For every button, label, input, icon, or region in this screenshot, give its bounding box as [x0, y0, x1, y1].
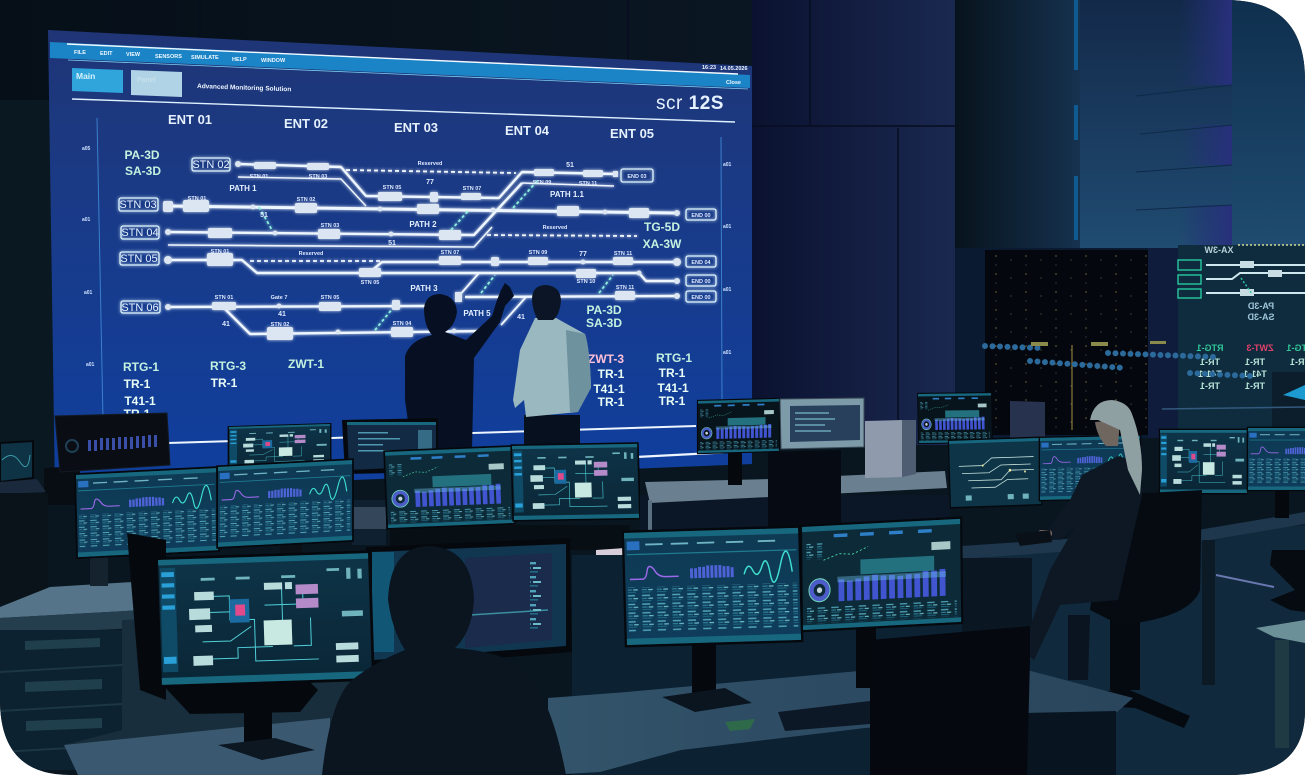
upper right wall panels	[955, 0, 1305, 250]
tab: secondary	[131, 70, 182, 97]
entrance headings: ENT 01	[168, 112, 212, 127]
small right desk	[1256, 620, 1305, 748]
entrance headings: ENT 02	[284, 116, 328, 131]
axis labels: a01	[84, 290, 93, 296]
status lists: TR-1	[124, 407, 151, 421]
foreground person	[322, 546, 566, 775]
entrance headings: ENT 03	[394, 120, 438, 135]
person: woman pointing at display	[405, 283, 514, 450]
main wall display: END 03	[627, 174, 647, 180]
small track labels: PATH 2	[409, 220, 437, 229]
axis labels: a01	[82, 217, 91, 223]
axis labels: a05	[82, 146, 91, 152]
route codes: SA-3D	[586, 316, 622, 330]
status lists: TR-1	[598, 367, 625, 381]
status lists: T41-1	[657, 381, 689, 395]
track diagram	[163, 161, 681, 340]
axis labels: a01	[723, 162, 732, 168]
menu bar: 14.05.2026	[720, 66, 748, 72]
front right desk	[548, 670, 1133, 775]
route codes: PA-3D	[124, 148, 160, 162]
chair at right back desk	[768, 450, 841, 528]
route codes: XA-3W	[643, 237, 682, 251]
menu bar: EDIT	[100, 51, 113, 57]
main wall display: END 00	[691, 213, 711, 219]
main wall display: STN 02	[192, 159, 230, 171]
tab: Main	[72, 68, 123, 93]
small track labels: STN 02	[271, 322, 289, 328]
status lists: RTG-1	[123, 360, 159, 374]
menu bar	[50, 42, 750, 89]
back row: log monitor	[342, 418, 438, 474]
desk drawers	[0, 630, 122, 770]
menu bar: WINDOW	[261, 58, 286, 64]
status lists: ZWT-1	[288, 357, 324, 371]
small track labels: Reserved	[418, 161, 442, 167]
menu bar: VIEW	[126, 52, 141, 58]
small track labels: STN 05	[321, 295, 339, 301]
small track labels: PATH 3	[410, 284, 438, 293]
route codes: TG-5D	[644, 220, 680, 234]
front right monitors	[622, 517, 963, 712]
small track labels: Reserved	[543, 225, 567, 231]
small track labels: STN 01	[211, 249, 229, 255]
small track labels: 51	[566, 162, 574, 169]
small track labels: STN 04	[393, 321, 412, 327]
small track labels: STN 07	[441, 250, 459, 256]
small track labels: STN 03	[309, 174, 327, 180]
screen number: scr 12S	[656, 93, 724, 114]
small track labels: 77	[579, 251, 587, 258]
glass wall with server racks and mirrored display: TR-1	[1200, 357, 1220, 367]
small track labels: 51	[260, 212, 268, 219]
small track labels: STN 07	[463, 186, 481, 192]
small track labels: STN 11	[579, 181, 597, 187]
small track labels: 51	[388, 240, 396, 247]
glass wall with server racks and mirrored display: TR-1	[1245, 357, 1265, 367]
menu bar: FILE	[74, 50, 86, 56]
glass wall with server racks and mirrored display	[955, 245, 1305, 438]
axis labels: a01	[723, 350, 732, 356]
small track labels: STN 11	[616, 285, 634, 291]
small track labels: 41	[278, 311, 286, 318]
small track labels: STN 09	[533, 180, 551, 186]
small track labels: STN 10	[577, 279, 595, 285]
floor right	[960, 525, 1305, 775]
screen subtitle: Advanced Monitoring Solution	[197, 83, 291, 93]
small track labels: STN 01	[215, 295, 233, 301]
small track labels: STN 01	[250, 174, 268, 180]
status lists: ZWT-3	[588, 352, 624, 366]
right back monitors	[697, 392, 1045, 485]
route codes: SA-3D	[125, 164, 161, 178]
status lists: T41-1	[593, 382, 625, 396]
menu bar: 16:23	[702, 65, 716, 71]
main wall display: END 00	[691, 295, 711, 301]
small track labels: STN 05	[361, 280, 379, 286]
small white screen	[596, 548, 622, 555]
status lists: TR-1	[211, 376, 238, 390]
small track labels: PATH 5	[463, 309, 491, 318]
axis labels: a01	[723, 287, 732, 293]
glass wall with server racks and mirrored display: T41-1	[1198, 369, 1222, 379]
dark equipment below display at left	[44, 466, 80, 505]
left equipment tower	[0, 493, 44, 500]
status lists	[124, 354, 692, 414]
chair behind front monitor	[127, 533, 318, 714]
small track labels: STN 05	[383, 185, 401, 191]
small track labels: Gate 7	[271, 295, 287, 301]
small track labels: 41	[222, 321, 230, 328]
small track labels: STN 11	[614, 251, 632, 257]
small track labels: PATH 1.1	[550, 190, 585, 199]
axis labels: a01	[86, 362, 95, 368]
glass wall with server racks and mirrored display: TR-1	[1200, 381, 1220, 391]
small track labels: 41	[517, 314, 525, 321]
menu bar: SENSORS	[155, 54, 182, 60]
back wall	[200, 0, 955, 445]
route codes	[124, 148, 682, 330]
person: man in white shirt	[513, 285, 591, 448]
middle floor	[68, 620, 350, 744]
back monitors: centre pair	[383, 442, 641, 550]
tab: secondary: Panel	[137, 77, 156, 84]
entrance headings: ENT 05	[610, 126, 654, 141]
small track labels: PATH 1	[229, 184, 257, 193]
status lists: TR-1	[598, 395, 625, 409]
route codes: PA-3D	[586, 303, 622, 317]
glass wall with server racks and mirrored display: PA-3D	[1247, 301, 1274, 311]
glass wall with server racks and mirrored display: T41-1	[1243, 369, 1267, 379]
white cabinet	[865, 420, 916, 478]
small track labels: STN 01	[188, 196, 206, 202]
glass wall with server racks and mirrored display: ZWT-3	[1246, 343, 1274, 353]
main wall display: END 04	[691, 260, 712, 266]
main wall display: END 00	[691, 279, 711, 285]
glass wall with server racks and mirrored display: TR-1	[1245, 381, 1265, 391]
back monitors: left pair	[74, 458, 386, 586]
station and end labels	[119, 158, 716, 313]
tab: Main: Main	[76, 71, 95, 81]
menu bar: SIMULATE	[191, 55, 219, 61]
front monitor: second screen	[366, 538, 572, 668]
small track labels: STN 09	[529, 250, 547, 256]
seated woman	[1015, 400, 1202, 728]
back row: dark laptop	[55, 413, 170, 472]
glass wall with server racks and mirrored display: SA-3D	[1247, 312, 1275, 322]
main wall display	[48, 30, 752, 492]
menu bar: Close	[726, 80, 741, 86]
status lists: RTG-1	[656, 351, 692, 365]
status lists: RTG-3	[210, 359, 246, 373]
left back desk	[0, 582, 134, 630]
back row: process monitor	[228, 423, 332, 465]
entrance headings	[168, 115, 654, 138]
right middle desk	[962, 512, 1305, 685]
small track labels: STN 03	[321, 223, 339, 229]
entrance headings: ENT 04	[505, 123, 550, 138]
floor centre	[572, 555, 1000, 775]
axis labels	[82, 146, 732, 368]
status lists: TR-1	[659, 394, 686, 408]
menu bar: HELP	[232, 57, 247, 63]
front left monitor	[155, 550, 375, 760]
status lists: T41-1	[124, 394, 156, 408]
small track labels: 77	[426, 179, 434, 186]
office chair at right edge	[1270, 550, 1305, 612]
main wall display: STN 03	[119, 199, 157, 211]
main wall display: STN 06	[121, 302, 159, 314]
main wall display: STN 04	[121, 227, 159, 239]
axis labels: a01	[723, 224, 732, 230]
right back desk	[640, 471, 947, 530]
front left desk	[64, 718, 330, 775]
small track labels: Reserved	[299, 251, 323, 257]
main wall display: STN 05	[120, 253, 158, 265]
far left small laptop	[0, 441, 46, 494]
foreground chair	[870, 626, 1030, 775]
status lists: TR-1	[124, 377, 151, 391]
small track labels: STN 02	[297, 197, 315, 203]
right monitors	[948, 427, 1305, 518]
small track labels	[188, 161, 634, 328]
glass wall with server racks and mirrored display: RTG-1	[1196, 343, 1224, 353]
status lists: TR-1	[659, 366, 686, 380]
glass wall with server racks and mirrored display: XA-3W	[1204, 245, 1234, 255]
